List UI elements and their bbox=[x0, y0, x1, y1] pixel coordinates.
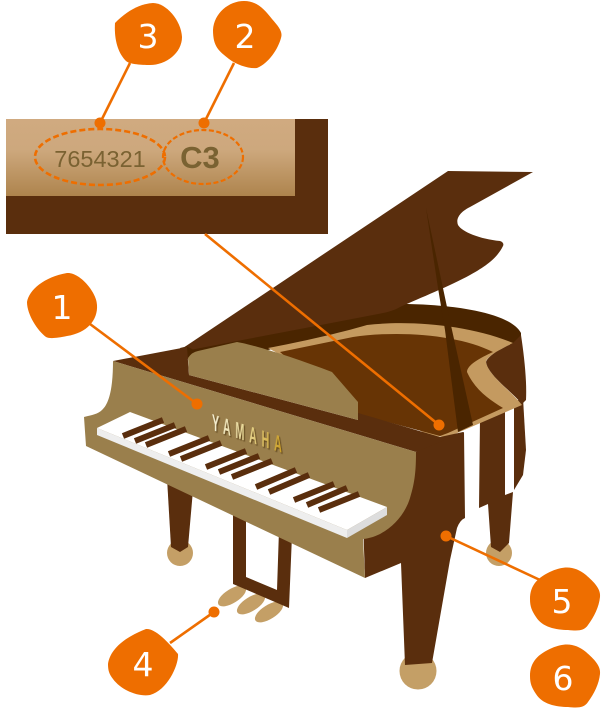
callout 5: 5 bbox=[552, 582, 572, 621]
ellipse: model code bbox=[163, 130, 243, 184]
callout 4: 4 bbox=[132, 645, 154, 684]
callout 3 bbox=[94, 3, 182, 128]
callout 4 bbox=[108, 606, 220, 695]
music desk bbox=[188, 342, 358, 420]
brand: YAMAHA: YAMAHA bbox=[212, 410, 287, 459]
black keys bbox=[123, 420, 359, 510]
pedal lyre bbox=[233, 510, 292, 608]
front panel bbox=[84, 361, 416, 578]
inset leader line bbox=[205, 234, 444, 430]
rear side strip bbox=[514, 398, 526, 490]
pedals bbox=[215, 582, 286, 626]
case body side bbox=[363, 432, 465, 665]
callout 1: 1 bbox=[52, 288, 72, 327]
callout 2: 2 bbox=[234, 17, 256, 56]
piano bbox=[84, 171, 533, 690]
lid bbox=[183, 171, 533, 350]
ellipse: serial number bbox=[35, 129, 165, 185]
top band bbox=[113, 347, 464, 452]
model code: C3 bbox=[180, 140, 220, 175]
callout 2 bbox=[198, 1, 282, 128]
hinge bbox=[180, 346, 198, 359]
panel: serial label inset bbox=[6, 119, 328, 234]
front foot bbox=[400, 652, 436, 690]
callout 1 bbox=[27, 273, 202, 410]
lid prop bbox=[426, 208, 473, 432]
soundboard bbox=[280, 334, 503, 436]
back leg right bbox=[479, 408, 513, 566]
keyboard bbox=[97, 412, 387, 538]
callout 3: 3 bbox=[138, 17, 158, 56]
callout 6: 6 bbox=[552, 659, 574, 698]
right curved side bbox=[486, 335, 526, 404]
serial number: 7654321 bbox=[54, 146, 146, 172]
rim bbox=[180, 304, 521, 362]
callout 5 bbox=[440, 530, 600, 630]
back leg left bbox=[167, 478, 193, 566]
soundboard ring bbox=[268, 323, 522, 437]
callout 6 bbox=[530, 645, 600, 707]
